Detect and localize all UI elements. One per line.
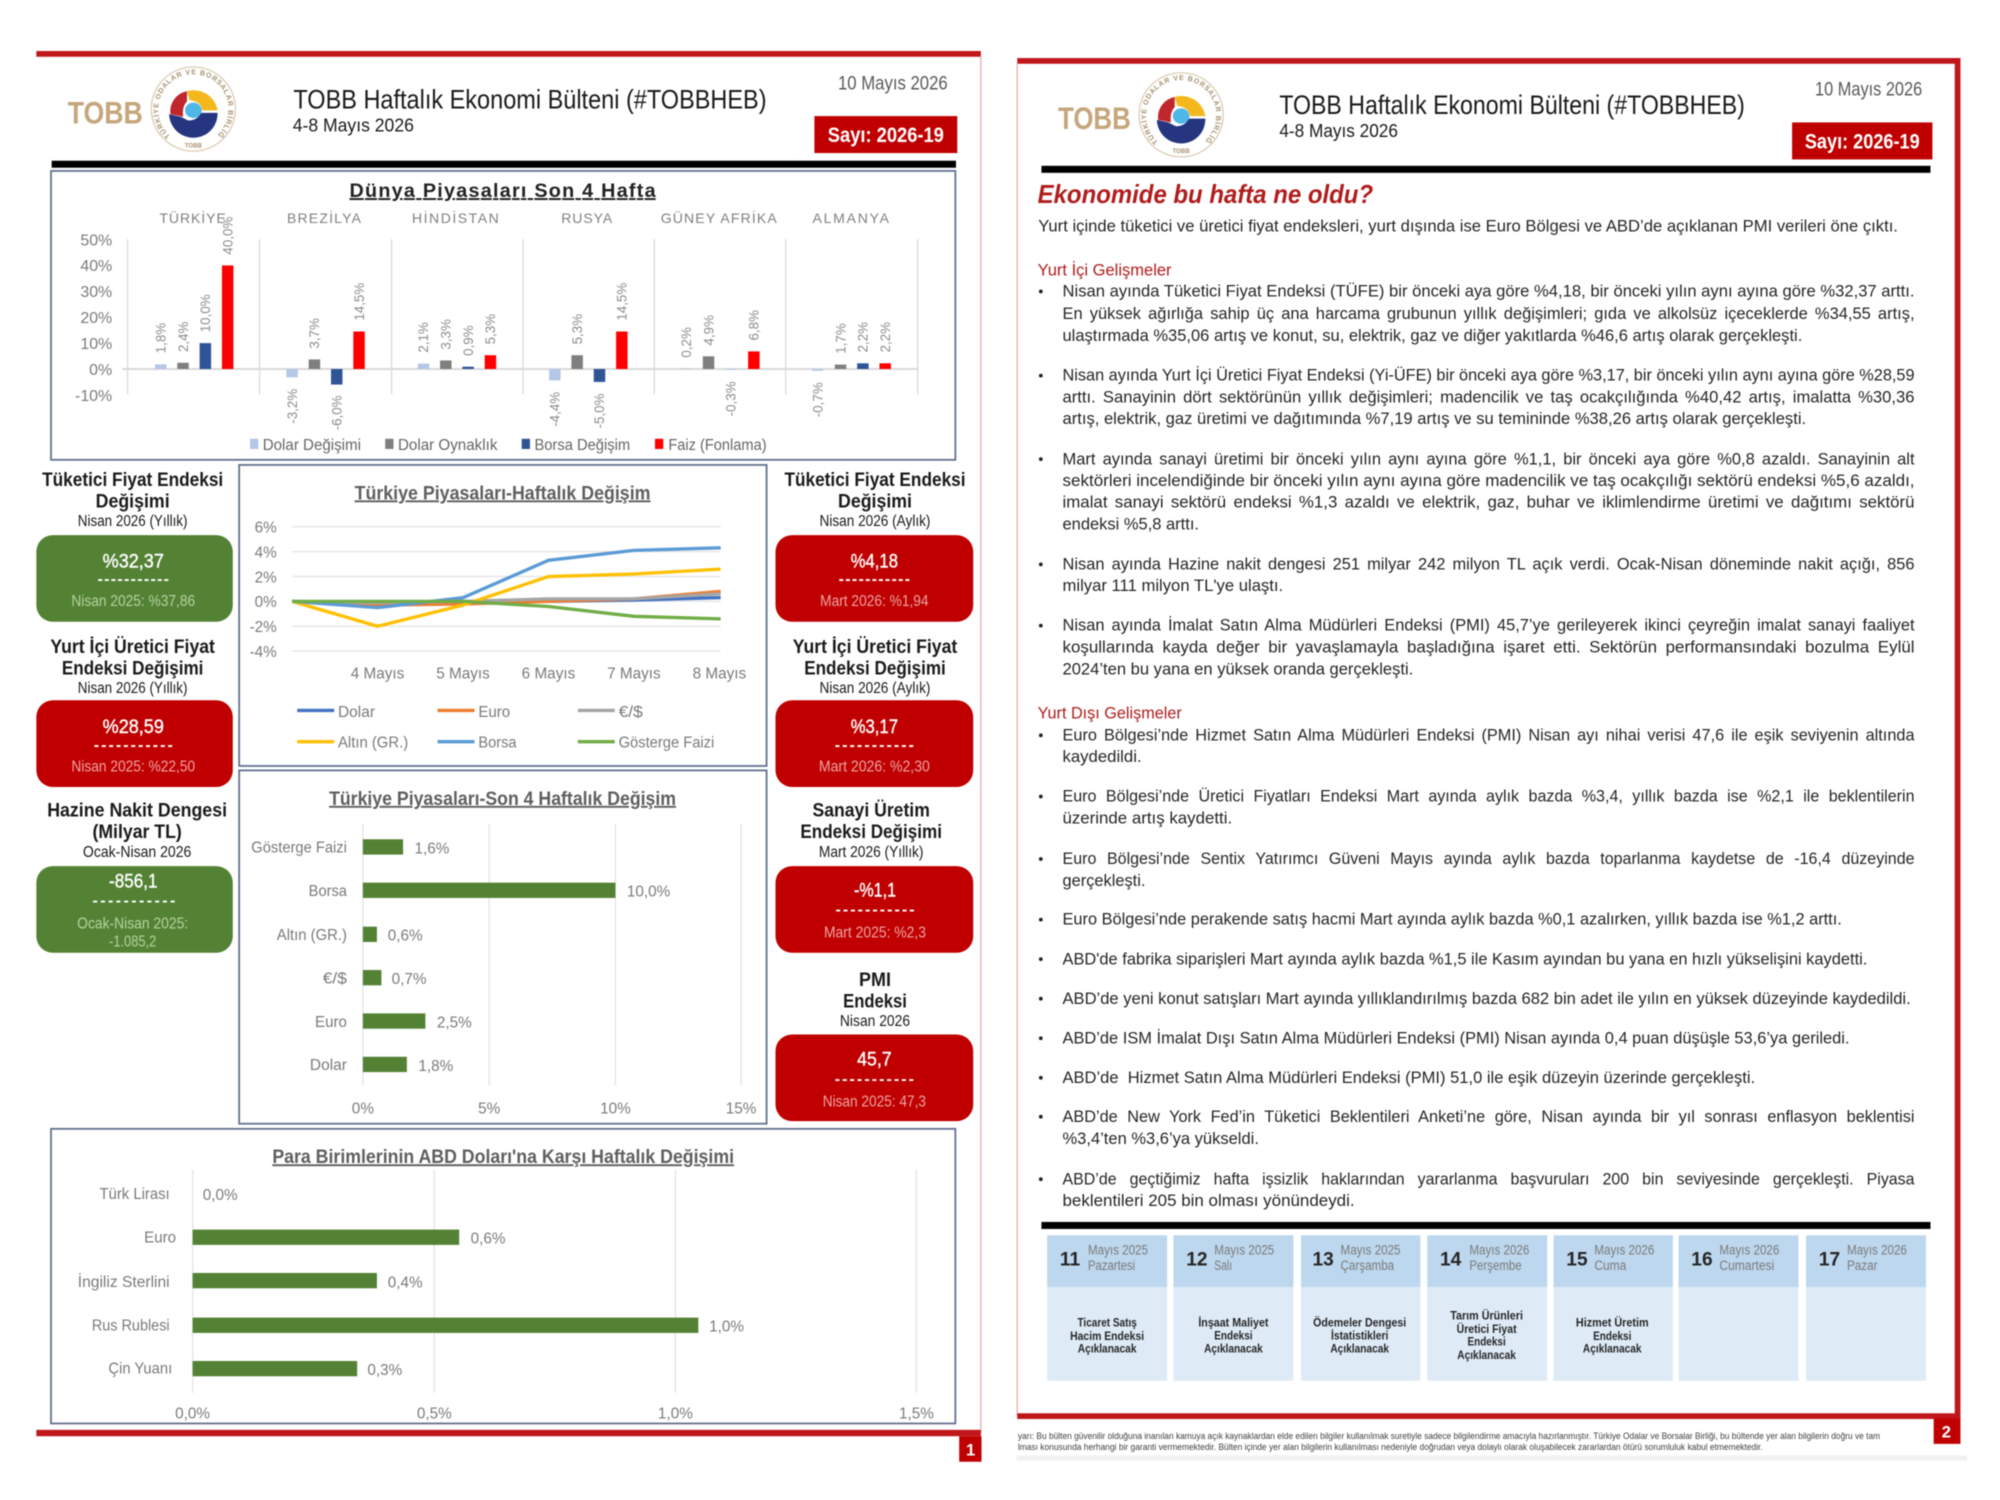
line chart y axis: -4% [250, 644, 277, 661]
bar value labels: -0,7% [810, 382, 825, 417]
KPI: Hazine nakit dengesi: (Milyar TL) [92, 821, 182, 843]
bullet: Sentix [1039, 849, 1915, 890]
bar value labels: 10,0% [198, 294, 213, 332]
KPI: TÜFE yıllık: Değişimi [96, 491, 170, 513]
4-week chart title: Türkiye Piyasaları-Son 4 Haftalık Değişim [329, 789, 676, 810]
line chart y axis [250, 520, 277, 661]
logo page 1: TOBB [185, 142, 203, 149]
calendar day 14: 14 [1440, 1249, 1462, 1270]
bullet: hizmet PMI [1039, 725, 1915, 766]
line chart legend: €/$ [619, 704, 643, 721]
calendar day 11: Ticaret Satış [1077, 1316, 1137, 1330]
KPI: Hazine nakit dengesi: -1.085,2 [109, 933, 156, 950]
calendar day 15: Açıklanacak [1583, 1342, 1642, 1356]
bullet: TÜFE: Nisan ayında Tüketici Fiyat Endeksi (TÜFE) bir önceki aya göre %4,18, bir önceki yılın aynı ayına göre %32,37 arttı. [1062, 282, 1915, 301]
calendar day 16: Mayıs 2026 [1719, 1242, 1779, 1257]
calendar day 14: Açıklanacak [1457, 1348, 1516, 1362]
bar value labels: 2,4% [176, 321, 191, 352]
KPI: Yi-ÜFE aylık: Endeksi Değişimi [804, 658, 946, 680]
line chart title: Türkiye Piyasaları-Haftalık Değişim [355, 483, 651, 504]
calendar day 11: Mayıs 2025 [1088, 1242, 1148, 1257]
page number 2: 2 [1942, 1422, 1951, 1441]
issue badge page 1: Sayı: 2026-19 [828, 124, 944, 147]
KPI: Sanayi üretim: Mart 2026 (Yıllık) [819, 844, 923, 861]
currency x axis: 1,0% [658, 1405, 693, 1422]
bullet: TÜFE: En yüksek ağırlığa sahip üç ana harcama grubunun yıllık değişimleri; gıda ve alkolsüz içeceklerde %34,55 artış, [1062, 304, 1915, 323]
weekly calendar [1047, 1235, 1926, 1381]
bullet: Sentix: gerçekleşti. [1062, 871, 1145, 890]
country labels: TÜRKİYE [159, 209, 226, 226]
currency labels: Euro [144, 1229, 176, 1246]
bar value labels: 5,3% [570, 314, 585, 344]
bullet: ISM: ABD’de ISM İmalat Dışı Satın Alma Müdürleri Endeksi (PMI) Nisan ayında 0,4 puan düşüşle 53,6’ya geriledi. [1062, 1028, 1849, 1047]
4-week category labels: €/$ [323, 970, 347, 987]
bar value labels: -5,0% [592, 393, 607, 428]
KPI: Yi-ÜFE yıllık: Yurt İçi Üretici Fiyat [50, 635, 215, 658]
KPI: Yi-ÜFE aylık [776, 635, 973, 787]
bullet: NY Fed [1039, 1107, 1915, 1148]
calendar day 13 [1301, 1235, 1420, 1381]
4-week value labels: 1,8% [418, 1058, 454, 1075]
country labels: HİNDİSTAN [412, 209, 499, 226]
currency values: 0,3% [367, 1362, 403, 1379]
bar value labels: 40,0% [220, 217, 235, 255]
calendar day 13: Ödemeler Dengesi [1313, 1315, 1406, 1330]
calendar day 12: Mayıs 2025 [1214, 1242, 1274, 1257]
page 1 frame [36, 51, 982, 1436]
bullet: PMI: Nisan ayında İmalat Satın Alma Müdürleri Endeksi (PMI) 45,7’ye gerileyerek ikinci çeyreğin imalat sanayi faaliyet [1062, 616, 1915, 635]
KPI: Sanayi üretim: Endeksi Değişimi [800, 821, 942, 843]
KPI: TÜFE yıllık: Nisan 2026 (Yıllık) [78, 513, 187, 530]
currency labels: Türk Lirası [99, 1186, 170, 1203]
bullet: TÜFE [1039, 282, 1915, 345]
panel: world markets [51, 171, 955, 460]
4-week category labels: Borsa [309, 883, 347, 900]
bar value labels: -0,3% [724, 381, 739, 416]
calendar day 11: Pazartesi [1088, 1258, 1135, 1273]
calendar day 17: 17 [1819, 1249, 1840, 1270]
KPI: Hazine nakit dengesi: -856,1 [109, 871, 158, 893]
calendar day 12: Salı [1214, 1258, 1232, 1273]
line chart x axis: 8 Mayıs [693, 666, 747, 683]
KPI: Sanayi üretim: Sanayi Üretim [812, 798, 930, 821]
bullet: TÜFE: ulaştırmada %35,06 artış ve konut, su, elektrik, gaz ve diğer yakıtlarda %46,6 artış olarak gerçekleşti. [1062, 326, 1802, 345]
currency labels: Çin Yuanı [108, 1361, 172, 1378]
line chart legend: Euro [478, 704, 510, 721]
calendar day 17: Pazar [1847, 1258, 1878, 1273]
currency values: 1,0% [709, 1319, 744, 1336]
bullet: Yi-ÜFE: arttı. Sanayinin dört sektörünün yıllık değişimleri; madencilik ve taş ocakçılığında %40,42 artış, imalatta %30,36 [1062, 387, 1915, 406]
line chart y axis: -2% [250, 619, 277, 636]
calendar day 11: 11 [1060, 1249, 1081, 1270]
KPI: Hazine nakit dengesi: Ocak-Nisan 2026 [83, 844, 191, 861]
world markets legend: Dolar Oynaklık [398, 437, 497, 454]
logo page 2: TOBB [1173, 148, 1190, 155]
line chart legend: Gösterge Faizi [619, 734, 714, 751]
line chart x axis: 7 Mayıs [607, 666, 661, 683]
calendar day 13: 13 [1312, 1249, 1334, 1270]
page number 1: 1 [966, 1440, 975, 1459]
issue badge page 2 [1792, 122, 1932, 159]
bar value labels: 3,7% [307, 318, 322, 349]
date page 1: 10 Mayıs 2026 [838, 73, 948, 94]
bullet: üretici fiyatları [1039, 787, 1915, 827]
calendar day 15: Endeksi [1593, 1329, 1631, 1343]
TOBB wordmark page 2: TOBB [1058, 100, 1131, 136]
page 2 frame [1017, 58, 1960, 1419]
bar value labels: -6,0% [329, 395, 344, 430]
y axis labels: 30% [80, 284, 112, 301]
calendar day 16 [1679, 1235, 1798, 1381]
disclaimer [1018, 1431, 1880, 1452]
KPI: Yi-ÜFE aylık: Nisan 2026 (Aylık) [820, 680, 930, 697]
calendar day 13: Mayıs 2025 [1341, 1242, 1401, 1257]
calendar day 15: Hizmet Üretim [1576, 1315, 1649, 1330]
bar value labels: 4,9% [701, 315, 716, 345]
bullet: Yi-ÜFE: Nisan ayında Yurt İçi Üretici Fiyat Endeksi (Yi-ÜFE) bir önceki aya göre %3,17, bir önceki yılın aynı ayına göre %28,59 [1062, 366, 1915, 385]
bar value labels: -3,2% [285, 389, 300, 424]
line chart legend: Dolar [338, 704, 375, 721]
calendar day 13: İstatistikleri [1331, 1327, 1388, 1342]
bullet: sanayi üretimi: sektörleri incelendiğinde bir önceki yılın aynı ayına göre madencilik ve taş ocakçılığı sektörü endeksi %5,6 azaldı, [1062, 471, 1915, 490]
4-week value labels [388, 840, 671, 1075]
KPI: TÜFE aylık: Değişimi [838, 491, 912, 513]
line chart x axis: 4 Mayıs [351, 666, 405, 683]
bullet: üretici fiyatları: üzerinde artış kaydetti. [1062, 808, 1232, 827]
KPI: PMI: Nisan 2026 [840, 1013, 910, 1030]
calendar day 14: Perşembe [1469, 1258, 1522, 1273]
bullet: PMI: koşullarında kayda değer bir yavaşlamayla başladığına işaret etti. Sektörün performansındaki bozulma Eylül [1062, 637, 1915, 656]
bar value labels: 1,8% [153, 323, 168, 353]
bullet: Yi-ÜFE [1039, 366, 1915, 428]
page number 1 [959, 1436, 982, 1462]
black rule page 1 [52, 161, 956, 168]
KPI: Yi-ÜFE yıllık [36, 635, 233, 787]
subtitle page 1: 4-8 Mayıs 2026 [293, 114, 414, 135]
currency values: 0,6% [471, 1231, 506, 1248]
bullet: sanayi üretimi: endeksi %5,8 arttı. [1062, 514, 1199, 533]
KPI: Sanayi üretim: Mart 2025: %2,3 [824, 924, 926, 941]
line chart y axis: 4% [255, 544, 277, 561]
KPI: Yi-ÜFE aylık: %3,17 [851, 716, 898, 738]
4-week value labels: 10,0% [627, 884, 671, 901]
KPI: TÜFE aylık: Tüketici Fiyat Endeksi [784, 469, 966, 491]
KPI: TÜFE yıllık: %32,37 [103, 551, 164, 573]
4-week category labels: Altın (GR.) [277, 927, 347, 944]
calendar day 14 [1427, 1235, 1547, 1381]
calendar day 16: 16 [1691, 1249, 1713, 1270]
KPI: Yi-ÜFE aylık: Mart 2026: %2,30 [819, 759, 930, 776]
bullet: perakende: Euro Bölgesi’nde perakende satış hacmi Mart ayında aylık bazda %0,1 azalırken, yıllık bazda ise %1,2 arttı. [1062, 910, 1842, 929]
section heading: Ekonomide bu hafta ne oldu? [1038, 181, 1373, 209]
KPI: TÜFE aylık: ----------- [839, 571, 910, 588]
bar value labels: 2,2% [856, 322, 871, 352]
calendar day 11: Hacim Endeksi [1070, 1329, 1144, 1343]
logo page 1: TÜRKİYE ODALAR VE BORSALAR BİRLİĞİ [152, 68, 234, 140]
line chart legend: Borsa [478, 734, 517, 751]
currency values [203, 1187, 744, 1379]
bullet: Sentix: Euro Bölgesi’nde Sentix Yatırımcı Güveni Mayıs ayında aylık bazda toparlanma kaydetse de -16,4 düzeyinde [1062, 849, 1915, 868]
4-week category labels: Euro [315, 1014, 347, 1031]
bullet: sanayi üretimi: Mart ayında sanayi üretimi bir önceki yılın aynı ayına göre %1,1, bir önceki aya göre %0,8 azaldı. Sanayinin alt [1062, 449, 1915, 468]
bar value labels: 2,1% [416, 322, 431, 353]
title page 2: TOBB Haftalık Ekonomi Bülteni (#TOBBHEB) [1279, 90, 1745, 120]
calendar day 13: Çarşamba [1341, 1258, 1395, 1273]
bar value labels [153, 217, 893, 430]
world markets legend: Faiz (Fonlama) [668, 437, 767, 454]
TOBB wordmark page 1: TOBB [68, 95, 143, 131]
KPI: Hazine nakit dengesi [36, 799, 233, 953]
date page 2: 10 Mayıs 2026 [1815, 80, 1922, 101]
4-week bars [363, 839, 615, 1072]
KPI: TÜFE aylık: Nisan 2026 (Aylık) [820, 513, 930, 530]
line chart x axis: 6 Mayıs [522, 666, 576, 683]
KPI: TÜFE aylık [776, 469, 973, 622]
currency x axis: 1,5% [899, 1405, 934, 1422]
KPI: TÜFE aylık: Mart 2026: %1,94 [820, 593, 929, 610]
bullet: işsizlik [1039, 1169, 1915, 1210]
domestic developments heading: Yurt İçi Gelişmeler [1038, 261, 1172, 280]
bullet: Hazine: milyar 111 milyon TL'ye ulaştı. [1062, 576, 1283, 595]
issue badge page 2: Sayı: 2026-19 [1805, 131, 1920, 154]
bullet: hizmet PMI: Euro Bölgesi’nde Hizmet Satın Alma Müdürleri Endeksi (PMI) Nisan ayı nihai verisi 47,6 ile eşik seviyenin altında [1062, 725, 1915, 744]
y axis labels: 20% [80, 310, 112, 327]
bar value labels: 14,5% [352, 283, 367, 321]
KPI: Yi-ÜFE yıllık: Endeksi Değişimi [62, 658, 203, 680]
calendar day 14: Endeksi [1467, 1335, 1506, 1349]
line chart legend: Altın (GR.) [338, 734, 408, 751]
KPI: Hazine nakit dengesi: Hazine Nakit Dengesi [47, 799, 227, 821]
line chart x axis: 5 Mayıs [436, 666, 490, 683]
country labels: BREZİLYA [287, 209, 362, 226]
currency x axis: 0,0% [175, 1405, 210, 1422]
4-week value labels: 2,5% [437, 1014, 472, 1031]
4-week value labels: 0,7% [392, 971, 427, 988]
y axis labels: 10% [80, 336, 112, 353]
black rule above calendar [1041, 1222, 1930, 1229]
currency values: 0,4% [388, 1275, 423, 1292]
world markets legend [250, 437, 767, 454]
country labels: RUSYA [561, 210, 613, 226]
currency labels [78, 1186, 176, 1378]
calendar day 14: Tarım Ürünleri [1450, 1308, 1523, 1323]
calendar day 11 [1047, 1235, 1167, 1381]
line chart y axis: 0% [255, 594, 277, 611]
4-week value labels: 0,6% [388, 928, 423, 945]
KPI: Sanayi üretim: ----------- [835, 902, 915, 919]
bullet: hizmet PMI ABD: ABD’de Hizmet Satın Alma Müdürleri Endeksi (PMI) 51,0 ile eşik düzeyin üzerinde gerçekleşti. [1062, 1068, 1755, 1087]
KPI: PMI: 45,7 [857, 1049, 892, 1071]
bar value labels: 5,3% [483, 314, 498, 344]
calendar day 17: Mayıs 2026 [1847, 1242, 1907, 1257]
line series [292, 548, 721, 626]
foreign developments list [1039, 725, 1915, 1210]
calendar day 17 [1806, 1235, 1926, 1381]
KPI: PMI: PMI [859, 969, 891, 991]
bullet: Hazine [1039, 555, 1915, 595]
logo page 2: TÜRKİYE ODALAR VE BORSALAR BİRLİĞİ [1140, 74, 1222, 146]
world markets legend: Dolar Değişimi [263, 437, 361, 454]
issue badge page 1 [814, 116, 957, 153]
calendar day 15: 15 [1566, 1249, 1588, 1270]
calendar day 15: Cuma [1594, 1258, 1627, 1273]
KPI: Yi-ÜFE aylık: ----------- [835, 737, 914, 754]
4-week x axis [352, 1101, 757, 1118]
4-week category labels [251, 840, 347, 1074]
bullet: Yi-ÜFE: artış, elektrik, gaz üretimi ve dağıtımında %7,19 artış ve su temininde %38,26 artış olarak gerçekleşti. [1062, 409, 1806, 428]
bullet: sanayi üretimi [1039, 449, 1915, 533]
bullet: fabrika siparişleri: ABD'de fabrika siparişleri Mart ayında aylık bazda %1,5 ile Kasım ayından bu yana en hızlı yükselişini kaydetti. [1062, 949, 1867, 968]
bar value labels: 0,9% [461, 325, 476, 356]
y axis labels [75, 233, 112, 405]
bar value labels: 6,8% [747, 310, 762, 341]
foreign developments heading: Yurt Dışı Gelişmeler [1038, 704, 1182, 723]
calendar day 13: Açıklanacak [1330, 1342, 1389, 1356]
calendar day 14: Üretici Fiyat [1457, 1321, 1517, 1336]
calendar day 12 [1173, 1235, 1293, 1381]
line chart y axis: 2% [255, 569, 277, 586]
bar value labels: 2,2% [878, 322, 893, 352]
bullet: üretici fiyatları: Euro Bölgesi’nde Üretici Fiyatları Endeksi Mart ayında aylık bazda %3,4, yıllık bazda ise %2,1 ile beklentilerin [1062, 787, 1915, 806]
4-week value labels: 1,6% [415, 840, 450, 857]
calendar day 16: Cumartesi [1719, 1258, 1774, 1273]
4-week x axis: 0% [352, 1101, 374, 1118]
bar value labels: 14,5% [615, 283, 630, 321]
bullet: Hazine: Nisan ayında Hazine nakit dengesi 251 milyar 242 milyon TL açık verdi. Ocak-Nisan döneminde nakit açığı, 856 [1062, 555, 1915, 574]
bar value labels: -4,4% [548, 392, 563, 427]
KPI: Sanayi üretim [776, 798, 973, 953]
currency x axis: 0,5% [417, 1405, 452, 1422]
4-week category labels: Gösterge Faizi [251, 840, 347, 857]
y axis labels: 0% [89, 362, 112, 379]
4-week category labels: Dolar [310, 1057, 347, 1074]
world markets legend: Borsa Değişim [534, 437, 630, 454]
KPI: PMI [776, 969, 973, 1121]
black rule page 2 [1041, 166, 1930, 173]
KPI: Sanayi üretim: -%1,1 [854, 880, 896, 902]
KPI: TÜFE yıllık: ----------- [98, 571, 169, 588]
bullet: PMI [1039, 616, 1915, 679]
y axis labels: 50% [80, 233, 112, 250]
subtitle page 2: 4-8 Mayıs 2026 [1279, 120, 1398, 141]
y axis labels: -10% [75, 388, 112, 405]
bullet: PMI: 2024’ten bu yana en yüksek oranda gerçekleşti. [1062, 660, 1413, 679]
line chart legend [297, 704, 714, 751]
KPI: Yi-ÜFE yıllık: Nisan 2026 (Yıllık) [78, 680, 187, 697]
line chart x axis [351, 666, 747, 683]
panel: currencies vs USD [51, 1129, 955, 1423]
clustered bars [155, 265, 891, 385]
calendar day 11: Açıklanacak [1078, 1342, 1137, 1356]
bullet: hizmet PMI: kaydedildi. [1062, 747, 1142, 766]
title page 1: TOBB Haftalık Ekonomi Bülteni (#TOBBHEB) [293, 84, 767, 114]
calendar day 14: Mayıs 2026 [1469, 1242, 1529, 1257]
currency x axis [175, 1405, 934, 1422]
calendar day 12: İnşaat Maliyet [1198, 1315, 1268, 1330]
line chart y axis: 6% [255, 520, 277, 537]
KPI: Yi-ÜFE yıllık: ----------- [94, 737, 173, 754]
disclaimer: lması konusunda herhangi bir garanti vermemektedir. Bülten içinde yer alan bilgilerin kullanılması nedeniyle doğrudan veya dolaylı olarak oluşabilecek zararlardan ötürü sorumluluk kabul etmemektedir. [1018, 1442, 1763, 1452]
calendar day 12: Endeksi [1214, 1328, 1253, 1342]
KPI: Yi-ÜFE aylık: Yurt İçi Üretici Fiyat [793, 635, 958, 658]
currency bars [193, 1230, 698, 1376]
bullet: sanayi üretimi: imalat sanayi sektörü endeksi %1,3 azaldı ve elektrik, gaz, buhar ve iklimlendirme üretimi ve dağıtımı sektörü [1062, 493, 1915, 512]
4-week x axis: 10% [600, 1101, 631, 1118]
4-week x axis: 15% [726, 1101, 757, 1118]
currency values: 0,0% [203, 1187, 238, 1204]
country labels: GÜNEY AFRİKA [661, 209, 777, 226]
country labels [159, 209, 890, 226]
page number 2 [1934, 1418, 1960, 1444]
currency labels: İngiliz Sterlini [78, 1273, 170, 1291]
KPI: PMI: Nisan 2025: 47,3 [823, 1094, 926, 1111]
intro sentence: Yurt içinde tüketici ve üretici fiyat endeksleri, yurt dışında ise Euro Bölgesi ve ABD’de açıklanan PMI verileri öne çıktı. [1038, 217, 1898, 236]
KPI: Yi-ÜFE yıllık: %28,59 [103, 716, 164, 738]
KPI: Hazine nakit dengesi: ----------- [92, 893, 175, 910]
bar value labels: 1,7% [833, 323, 848, 354]
calendar day 15: Mayıs 2026 [1594, 1242, 1654, 1257]
KPI: PMI: Endeksi [843, 991, 907, 1013]
bar value labels: 0,2% [679, 327, 694, 358]
bullet: NY Fed: %3,4’ten %3,6’ya yükseldi. [1062, 1129, 1259, 1148]
panel: bar chart 4-week change [239, 770, 767, 1124]
country labels: ALMANYA [812, 210, 890, 226]
bullet: konut satışları: ABD’de yeni konut satışları Mart ayında yıllıklandırılmış bazda 682 bin adet ile yılın en yüksek düzeyinde kaydedildi. [1062, 989, 1911, 1008]
4-week x axis: 5% [478, 1101, 501, 1118]
world markets title: Dünya Piyasaları Son 4 Hafta [349, 180, 657, 202]
bar value labels: 3,3% [439, 319, 454, 350]
panel: line chart weekly change [239, 465, 767, 766]
currencies chart title: Para Birimlerinin ABD Doları'na Karşı Haftalık Değişimi [272, 1147, 734, 1168]
y axis labels: 40% [80, 258, 112, 275]
bullet: işsizlik: ABD’de geçtiğimiz hafta işsizlik haklarından yararlanma başvuruları 200 bin seviyesinde gerçekleşti. Piyasa [1062, 1169, 1915, 1188]
calendar day 12: Açıklanacak [1204, 1342, 1263, 1356]
bullet: NY Fed: ABD’de New York Fed’in Tüketici Beklentileri Anketi’ne göre, Nisan ayında bir yıl sonrası enflasyon beklentisi [1062, 1107, 1915, 1126]
disclaimer: yarı: Bu bülten güvenilir olduğuna inanılan kamuya açık kaynaklardan elde edilen bilgiler kullanılmak suretiyle sadece bilgilendirme amacıyla hazırlanmıştır. Türkiye Odalar ve Borsalar Birliği, bu bültende yer alan bilgilerin doğru ve tam [1018, 1431, 1880, 1441]
KPI: TÜFE yıllık [36, 469, 233, 622]
KPI: PMI: ----------- [835, 1071, 914, 1088]
bullet: işsizlik: beklentileri 205 bin olması yönündeydi. [1062, 1191, 1355, 1210]
KPI: TÜFE yıllık: Tüketici Fiyat Endeksi [42, 469, 223, 491]
currency labels: Rus Rublesi [92, 1317, 170, 1334]
KPI: Yi-ÜFE yıllık: Nisan 2025: %22,50 [71, 759, 195, 776]
KPI: TÜFE yıllık: Nisan 2025: %37,86 [71, 593, 195, 610]
calendar day 15 [1554, 1235, 1673, 1381]
domestic developments list [1039, 282, 1915, 679]
KPI: TÜFE aylık: %4,18 [851, 551, 898, 573]
KPI: Hazine nakit dengesi: Ocak-Nisan 2025: [77, 916, 188, 933]
calendar day 12: 12 [1186, 1249, 1208, 1270]
